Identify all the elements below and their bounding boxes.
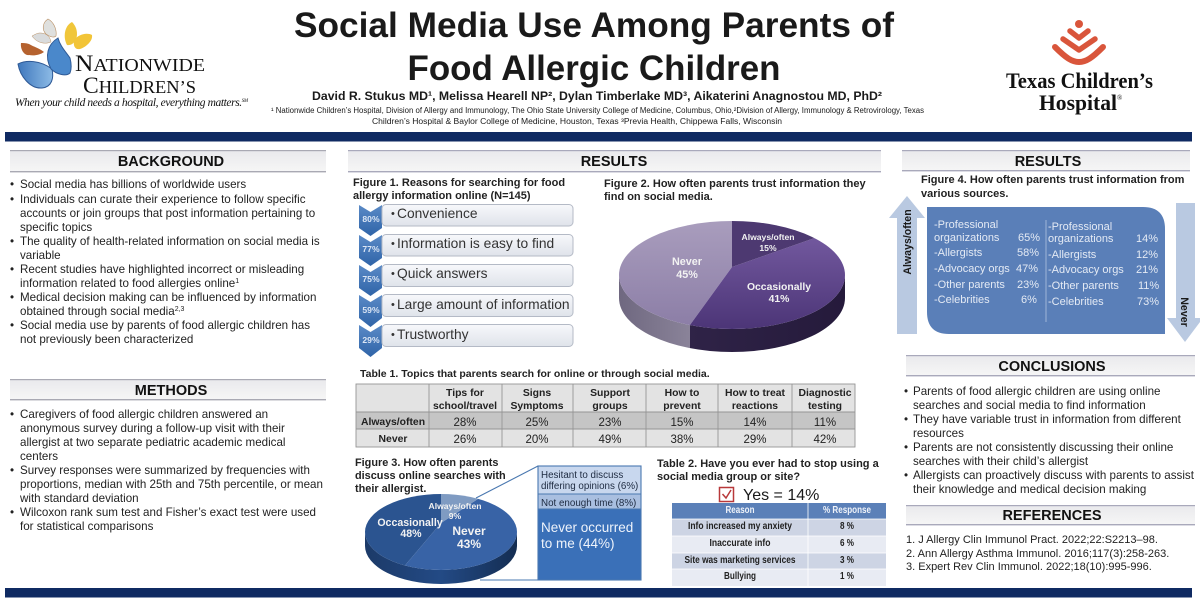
text: background bullets: • [10,235,14,248]
table 1 title: Table 1. Topics that parents search for online or through social media. [360,368,710,380]
table 1 grid: Tips for [446,388,484,399]
table 1 grid: reactions [732,401,778,412]
panel: source percentages: 11% [1138,280,1159,292]
table 1 grid: 26% [453,434,477,446]
table 1 grid: 42% [813,434,837,446]
text: reference list: 2. Ann Allergy Asthma Immunol. 2016;117(3):258-263. [906,548,1169,560]
text: background bullets: • [10,193,14,206]
panel: source percentages: 12% [1136,249,1158,261]
text: methods bullets: • [10,464,14,477]
panel: source percentages: -Celebrities [1048,296,1104,308]
title: Social Media Use Among Parents of [294,6,894,45]
text: background bullets: The quality of health-related information on social media is [20,235,320,248]
table 1 grid: Symptoms [510,401,564,412]
pie chart: figure 3: Always/often [428,501,482,511]
table 1 grid: How to treat [725,388,786,399]
arrow: never down [1167,203,1200,342]
table 1 grid: 14% [743,417,767,429]
panel: source percentages: -Allergists [934,247,983,259]
table 2 grid: Info increased my anxiety [688,521,792,532]
table 1 grid: 11% [814,417,836,429]
figure 1 title: allergy information online (N=145) [353,190,531,202]
pie chart: figure 3: 43% [457,537,481,551]
pie chart: figure 3: Occasionally [377,517,443,529]
table 2 title [657,458,880,483]
panel: background [10,150,326,346]
table 1 grid: groups [592,401,628,412]
pie chart: figure 2: Always/often [741,232,795,242]
row: convenience 80%: • [391,208,395,220]
heading: methods: METHODS [135,383,208,399]
text: background bullets: specific topics [20,221,92,234]
table 1 grid: Always/often [361,417,425,428]
text: methods bullets: centers [20,450,58,463]
figure 4: trust by source [889,174,1200,342]
panel: source percentages: -Professional [1048,221,1112,233]
icon: butterflies [18,19,92,88]
heading: conclusions: CONCLUSIONS [998,359,1106,375]
panel: source percentages [927,207,1165,334]
panel: source percentages: 14% [1136,233,1158,245]
pie chart: figure 3: 48% [400,528,422,540]
figure 3 title: Figure 3. How often parents [355,457,498,469]
table 1 grid: 25% [525,417,549,429]
arrow: always/often up: Always/often [902,209,914,275]
row: large amount of information 59%: Large amount of information [397,297,570,312]
pie chart: figure 2: 41% [769,294,789,305]
row: information is easy to find 77%: • [391,238,395,250]
text: methods bullets: Survey responses were summarized by frequencies with [20,464,310,477]
text: methods bullets: anonymous survey during a follow-up visit with their [20,422,285,435]
tagline: When your child needs a hospital, everything matters. [15,97,242,109]
arrow: never down: Never [1178,297,1190,327]
text: methods bullets: proportions, median with 25th and 75th percentile, or mean [20,478,323,491]
text: background bullets: Social media has billions of worldwide users [20,178,246,191]
table 1 grid: testing [808,401,842,412]
heading: methods [10,379,326,400]
panel: source percentages: -Professional [934,219,998,231]
row: convenience 80% [359,204,573,236]
row: information is easy to find 77% [359,234,573,266]
figure 2: trust in social media [600,178,866,352]
table 2 grid: Bullying [724,571,756,582]
text: methods bullets: • [10,506,14,519]
icon: Texas Children's mark [1055,20,1103,62]
figure 3 title: discuss online searches with [355,470,506,482]
text: background bullets: • [10,291,14,304]
panel: conclusions [904,355,1195,496]
text: background bullets: variable [20,249,61,262]
row: large amount of information 59%: • [391,299,395,311]
authors: David R. Stukus MD¹, Melissa Hearell NP², Dylan Timberlake MD³, Aikaterini Anagnostou MD, PhD² [312,89,882,103]
panel: source percentages: -Other parents [934,279,1005,291]
panel: references [906,505,1195,573]
table 1 grid: Signs [523,388,551,399]
panel: source percentages: 73% [1137,296,1159,308]
pie chart: figure 2 [619,221,845,352]
text: conclusions bullets: Parents of food allergic children are using online [913,385,1160,398]
table 1 grid: Diagnostic [798,388,852,399]
panel: source percentages: 58% [1017,247,1039,259]
affiliations: ¹ Nationwide Children’s Hospital, Division of Allergy and Immunology, The Ohio State University College of Medicine, Columbus, Ohio,²Division of Allergy, Immunology & Retrovirology, Texas [271,106,924,115]
text: background bullets: accounts or join groups that post information pertaining to [20,207,315,220]
yes equals 14%: Yes = 14% [743,487,819,504]
text: conclusions bullets: Parents are not consistently discussing their online [913,441,1173,454]
text: conclusions bullets: their knowledge and medical decision making [913,483,1146,496]
panel: source percentages: 65% [1018,232,1040,244]
row: quick answers 75% [359,264,573,296]
text: conclusions bullets: • [904,385,908,398]
text: background bullets: • [10,319,14,332]
row: convenience 80%: 80% [362,214,380,224]
table 2 grid: Site was marketing services [684,555,796,566]
pie chart: figure 2: Occasionally [747,282,811,293]
pie chart: figure 2: 45% [676,269,698,281]
text: reference list: 3. Expert Rev Clin Immunol. 2022;18(10):995-996. [906,561,1152,573]
text: conclusions bullets: searches and social media to find information [913,399,1146,412]
callout: reasons not discussed: Not enough time (8%) [541,498,636,509]
affiliations [271,106,924,126]
panel: source percentages: -Advocacy orgs [1048,264,1124,276]
panel: source percentages: 6% [1021,294,1037,306]
row: trustworthy 29%: • [391,329,395,341]
row: trustworthy 29% [359,324,573,357]
figure 3 title [355,457,506,495]
pie chart: figure 3 [365,494,517,584]
callout: reasons not discussed: differing opinions (6%) [541,481,638,492]
callout: reasons not discussed: Never occurred [541,520,633,535]
text: methods bullets: with standard deviation [19,492,139,505]
text: background bullets: 2,3 [175,306,185,313]
text: background bullets: not previously been characterized [20,333,193,346]
logo: Texas Children's Hospital [1006,20,1153,115]
table 1 grid: prevent [663,401,701,412]
wordmark: Texas Children’s [1006,68,1153,93]
figure 2 title [604,178,866,203]
panel: source percentages: organizations [934,232,1000,244]
wordmark: NATIONWIDE [75,51,205,76]
text: background bullets: Individuals can curate their experience to follow specific [20,193,306,206]
callout: reasons not discussed [538,466,641,580]
panel: source percentages: organizations [1048,233,1114,245]
table 2 grid: 3 % [840,555,854,566]
panel: source percentages: -Celebrities [934,294,990,306]
heading: references: REFERENCES [1002,508,1102,524]
tagline: SM [242,99,249,104]
text: methods bullets: for statistical comparisons [20,520,154,533]
text: methods bullets: allergist at two separate pediatric academic medical [20,436,286,449]
heading: conclusions [906,355,1195,376]
row: convenience 80%: Convenience [397,206,478,221]
heading: background: BACKGROUND [118,154,224,170]
table 1 grid: 23% [598,417,622,429]
figure 4 title: Figure 4. How often parents trust information from [921,174,1185,186]
text: methods bullets: Wilcoxon rank sum test and Fisher’s exact test were used [20,506,316,519]
panel: source percentages: 47% [1016,263,1038,275]
table 1 grid [356,384,855,447]
table 1 grid: How to [665,388,699,399]
text: conclusions bullets: • [904,413,908,426]
text: background bullets: • [10,263,14,276]
row: quick answers 75%: 75% [362,274,380,284]
text: background bullets: information related to food allergies online [20,277,235,290]
panel: source percentages: 23% [1017,279,1039,291]
heading: results right: RESULTS [1015,154,1082,170]
figure 4 title [921,174,1185,200]
callout: reasons not discussed: to me (44%) [541,536,615,551]
figure 1: reasons for searching [353,177,573,357]
figure 2 title: find on social media. [604,191,713,203]
panel: source percentages: -Advocacy orgs [934,263,1010,275]
title [294,6,894,88]
heading: references [906,505,1195,525]
heading: results centre [348,150,881,172]
panel: source percentages: -Other parents [1048,280,1119,292]
text: background bullets: Social media use by parents of food allergic children has [20,319,310,332]
table 2: stopped using a group [657,458,886,586]
table 1 grid: 38% [670,434,694,446]
arrow: always/often up [889,196,925,334]
table 1: topics [356,368,855,447]
heading: results right [902,150,1190,171]
logo: Nationwide Children's: CHILDREN’S [83,73,196,98]
row: quick answers 75%: • [391,268,395,280]
pie chart: figure 2: 15% [759,243,777,253]
logo: Texas Children's Hospital: Hospital [1039,90,1117,115]
text: conclusions bullets: They have variable trust in information from different [913,413,1182,426]
logo: Nationwide Children's [15,19,249,109]
row: information is easy to find 77%: Information is easy to find [397,236,554,251]
panel: source percentages: -Allergists [1048,249,1097,261]
figure 1 title [353,177,565,202]
heading: results centre: RESULTS [581,154,648,170]
title: Food Allergic Children [408,49,780,88]
table 1 grid: school/travel [433,401,497,412]
row: large amount of information 59% [359,294,573,327]
text: conclusions bullets: Allergists can proactively discuss with parents to assist [913,469,1195,482]
icon: checked box [720,488,734,502]
table 2 title: Table 2. Have you ever had to stop using a [657,458,880,470]
text: background bullets: 1 [235,278,239,285]
text: methods bullets: • [10,408,14,421]
pie chart: figure 3: 9% [449,511,462,521]
table 2 grid: Reason [726,505,754,516]
panel: source percentages: 21% [1136,264,1158,276]
table 2 title: social media group or site? [657,471,800,483]
text: reference list [906,534,1169,573]
table 1 grid: 15% [670,417,694,429]
heading: background [10,150,326,172]
callout connector lines [476,466,538,580]
table 2 grid: % Response [823,505,871,516]
text: reference list: 1. J Allergy Clin Immunol Pract. 2022;22:S2213–98. [906,534,1158,546]
text: background bullets [10,178,320,346]
bottom bar [5,588,1192,598]
top bar [5,132,1192,142]
panel: methods [10,379,326,533]
table 1 grid: Never [379,434,407,445]
figure 3: discussing with allergist [350,457,641,589]
callout: reasons not discussed: Hesitant to discuss [541,470,623,481]
text: conclusions bullets: searches with their child’s allergist [913,455,1089,468]
figure 4 title: various sources. [921,188,1008,200]
pie chart: figure 3: Never [452,524,486,538]
table 2 grid: 8 % [840,521,854,532]
table 1 grid: 29% [743,434,767,446]
table 2 grid: 1 % [840,571,854,582]
row: trustworthy 29%: Trustworthy [397,327,469,342]
table 1 grid: 20% [525,434,549,446]
table 2 grid: 6 % [840,538,854,549]
table 1 grid: 49% [598,434,622,446]
text: background bullets: Medical decision making can be influenced by information [20,291,316,304]
table 2 grid [672,503,886,586]
text: methods bullets [10,408,323,533]
pie chart: figure 2: Never [672,256,703,268]
figure 3 title: their allergist. [355,483,426,495]
text: conclusions bullets: • [904,469,908,482]
text: methods bullets: Caregivers of food allergic children answered an [20,408,268,421]
table 2 grid: Inaccurate info [710,538,770,549]
logo: Texas Children's Hospital: ® [1117,94,1123,102]
row: large amount of information 59%: 59% [362,305,380,315]
text: background bullets: • [10,178,14,191]
text: conclusions bullets [904,385,1195,496]
row: trustworthy 29%: 29% [362,335,380,345]
figure 2 title: Figure 2. How often parents trust information they [604,178,866,190]
text: conclusions bullets: resources [913,427,964,440]
table 1 grid: 28% [453,417,477,429]
table 1 grid: Support [590,388,630,399]
text: background bullets: Recent studies have highlighted incorrect or misleading [20,263,304,276]
affiliations: Children’s Hospital & Baylor College of Medicine, Houston, Texas ³Previa Health, Chippewa Falls, Wisconsin [372,117,782,126]
text: conclusions bullets: • [904,441,908,454]
row: information is easy to find 77%: 77% [362,244,380,254]
row: quick answers 75%: Quick answers [397,266,488,281]
text: background bullets: obtained through social media [20,305,175,318]
figure 1 title: Figure 1. Reasons for searching for food [353,177,565,189]
